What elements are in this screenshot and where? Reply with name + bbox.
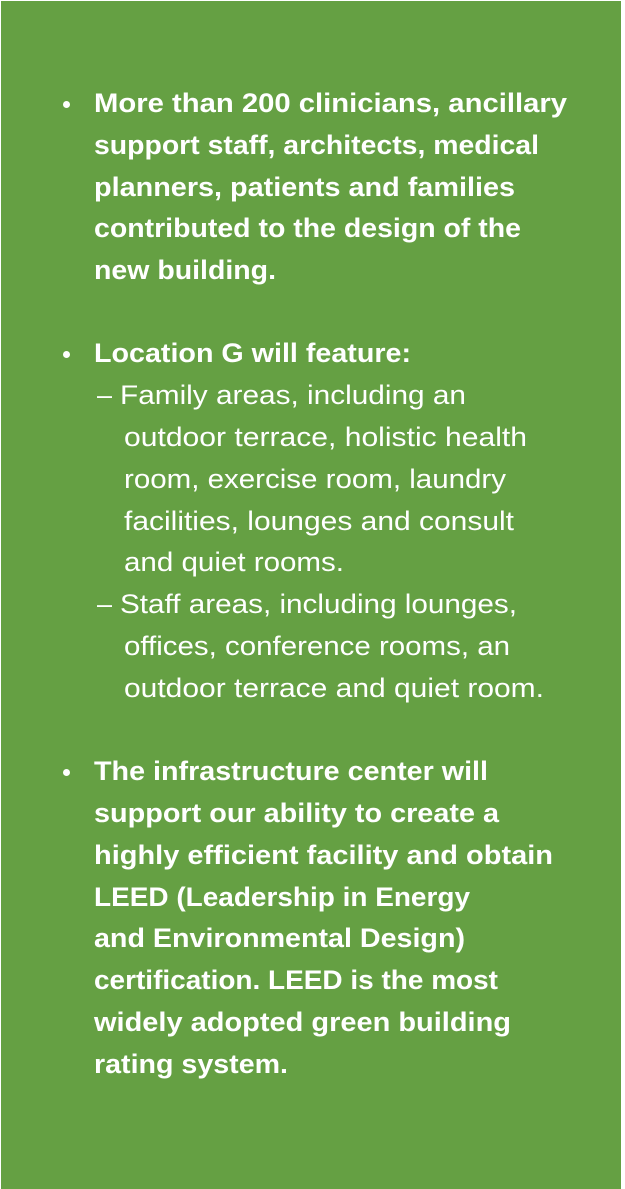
bullet 2: Location G features: and quiet rooms.	[124, 547, 344, 577]
bullet 3: infrastructure center and LEED: rating system.	[94, 1049, 288, 1079]
bullet 2: Location G features: Location G will feature:	[94, 338, 411, 368]
bullet 2: Location G features: –	[97, 380, 112, 410]
bullet 3: infrastructure center and LEED: The infrastructure center will	[94, 756, 488, 786]
bullet 3: infrastructure center and LEED: and Environmental Design)	[94, 923, 465, 953]
bullet 1: contributors: contributed to the design of the	[94, 213, 521, 243]
bullet 3: infrastructure center and LEED: support our ability to create a	[94, 798, 500, 828]
bullet 1: contributors	[63, 88, 567, 285]
bullet 2: Location G features: outdoor terrace, holistic health	[124, 422, 527, 452]
bullet 2: Location G features: –	[97, 589, 112, 619]
bullet 2: Location G features: offices, conference rooms, an	[124, 631, 510, 661]
bullet 3: infrastructure center and LEED	[63, 756, 553, 1079]
bullet 3: infrastructure center and LEED: highly efficient facility and obtain	[94, 840, 553, 870]
bullet 2: Location G features	[63, 338, 544, 703]
bullet 1: contributors: support staff, architects, medical	[94, 130, 539, 160]
bullet 2: Location G features: outdoor terrace and quiet room.	[124, 673, 544, 703]
bullet 3: infrastructure center and LEED: widely adopted green building	[93, 1007, 511, 1037]
bullet 2: Location G features: Staff areas, including lounges,	[120, 589, 517, 619]
bullet 3: infrastructure center and LEED: LEED (Leadership in Energy	[94, 882, 470, 912]
bullet 1: contributors: planners, patients and families	[94, 172, 515, 202]
bullet 2: Location G features: Family areas, including an	[120, 380, 466, 410]
bullet 2: Location G features: facilities, lounges and consult	[124, 506, 515, 536]
bullet 2: Location G features: room, exercise room, laundry	[124, 464, 507, 494]
bullet 3: infrastructure center and LEED: certification. LEED is the most	[94, 965, 498, 995]
bullet 1: contributors: new building.	[94, 255, 276, 285]
bullet 1: contributors: More than 200 clinicians, ancillary	[94, 88, 567, 118]
